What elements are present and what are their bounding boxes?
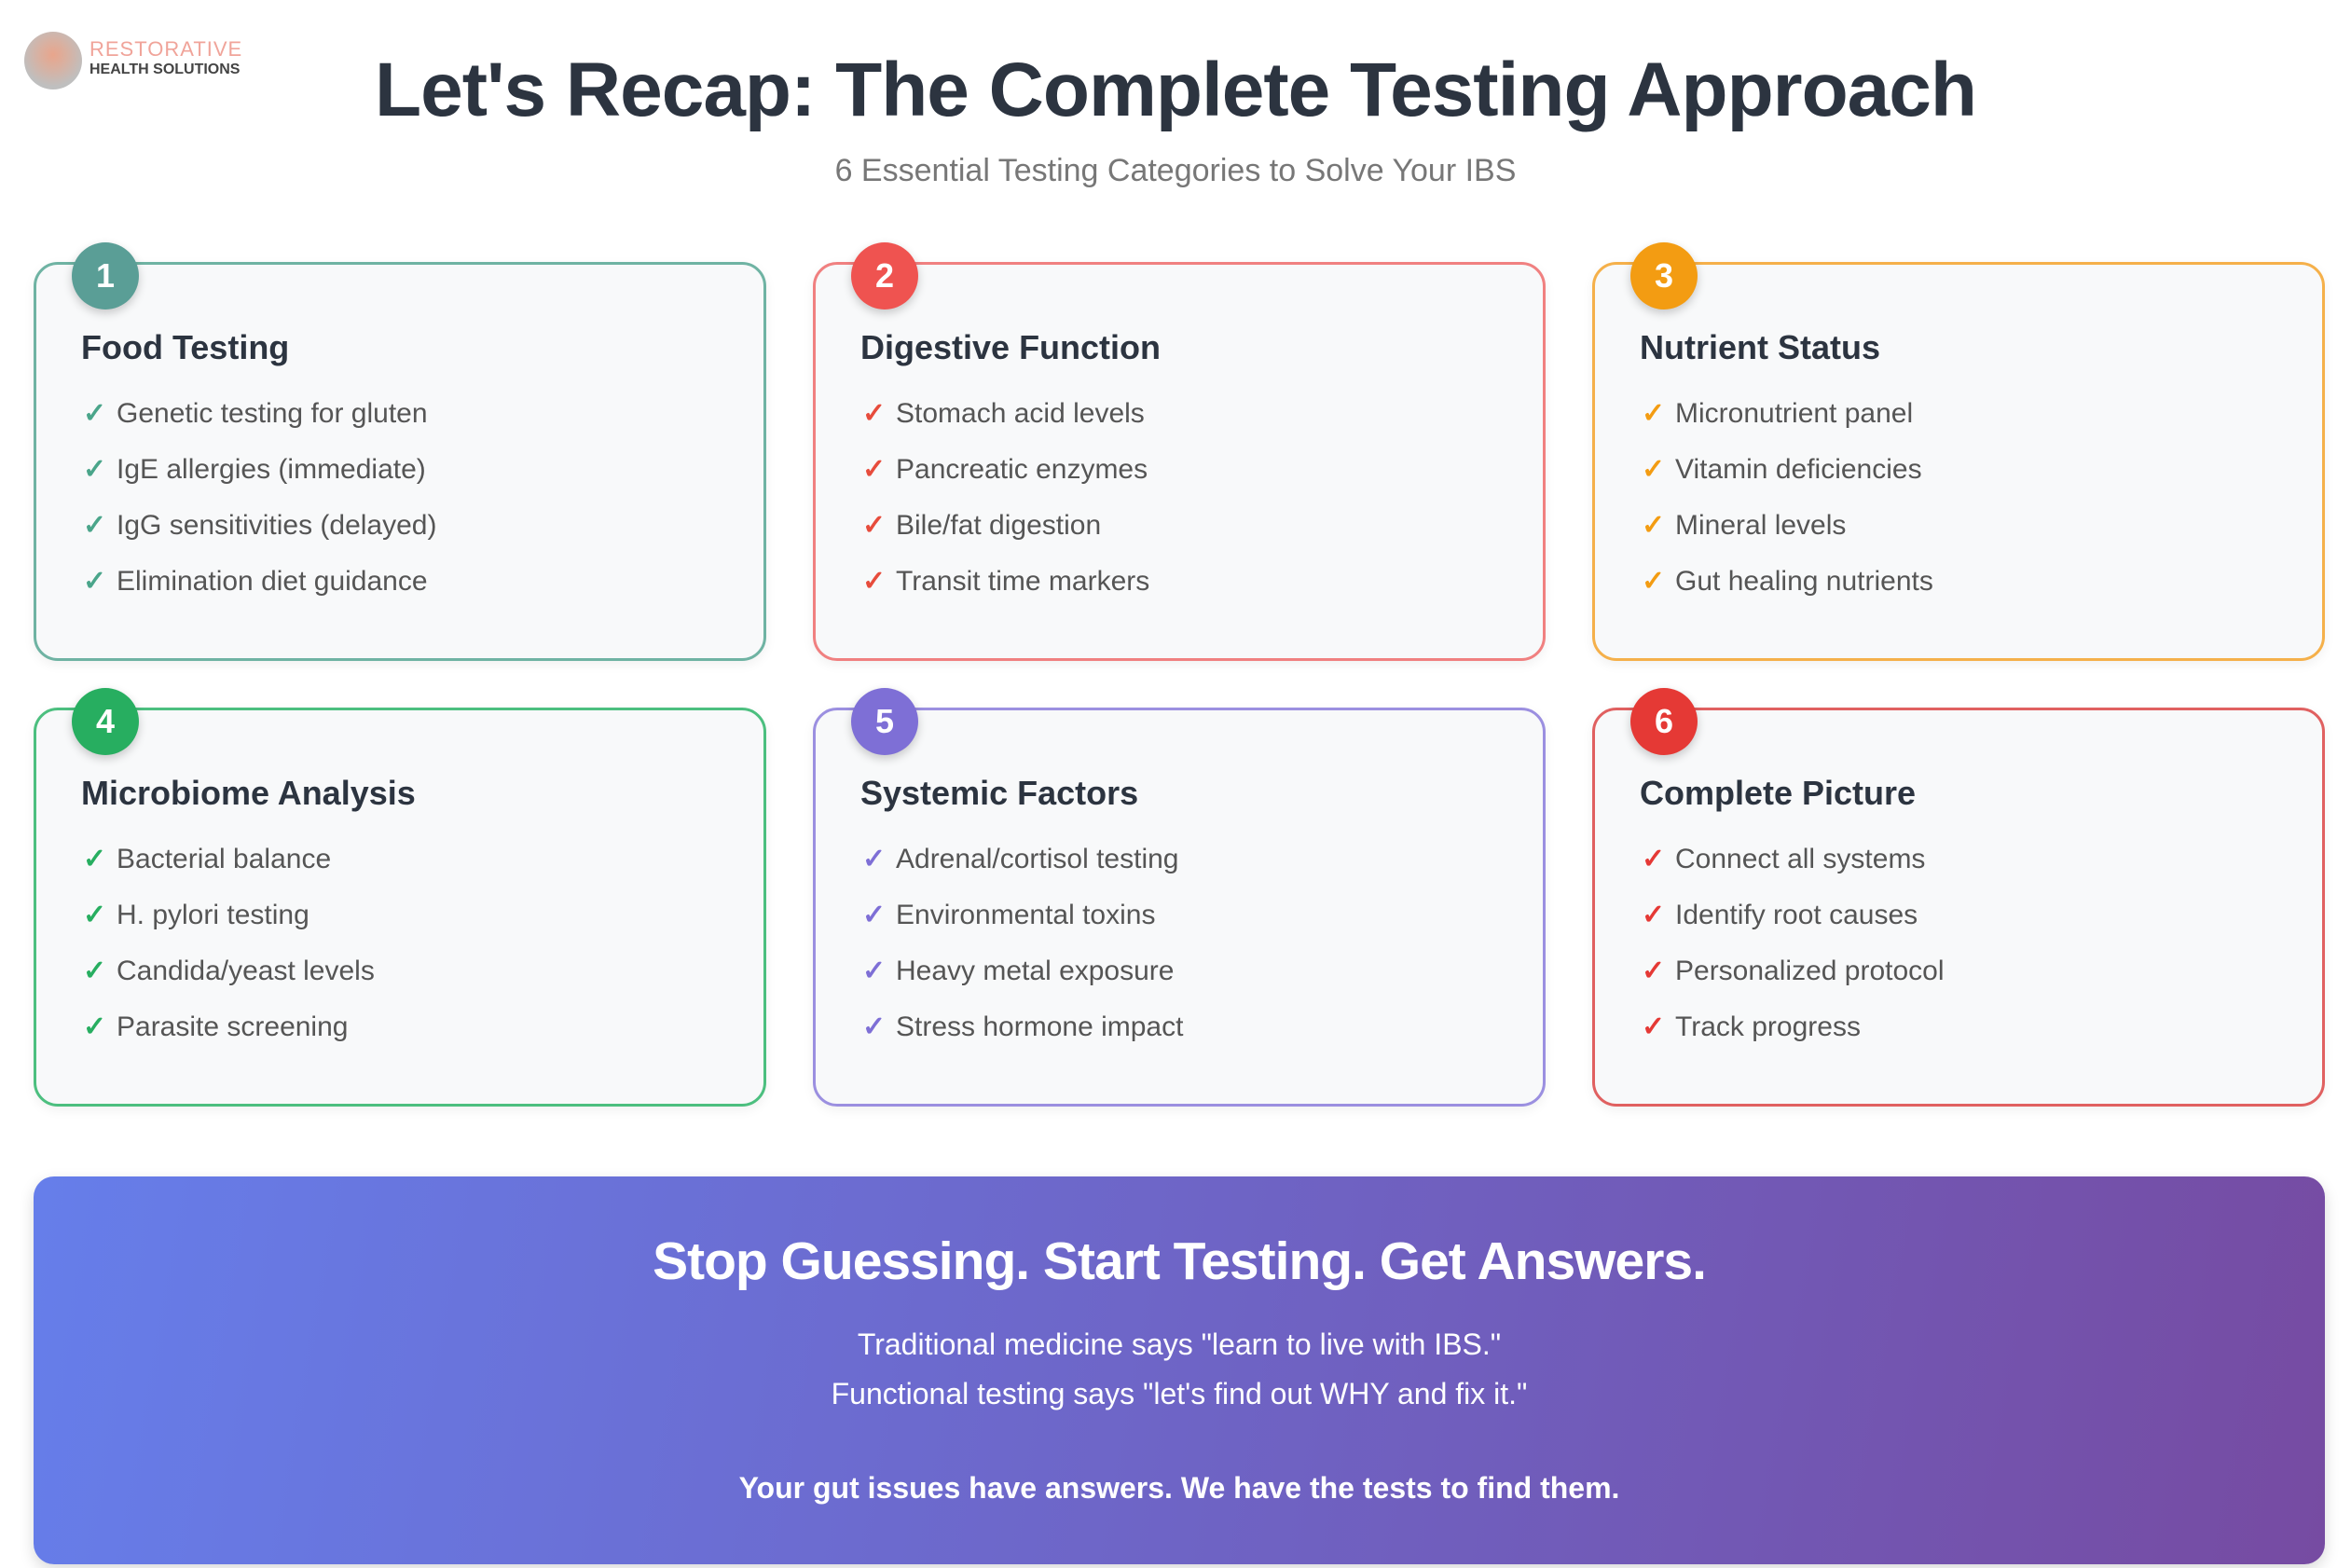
list: ✓ bbox=[1642, 566, 1665, 597]
list: Identify root causes bbox=[1675, 900, 1918, 930]
list: Stomach acid levels bbox=[896, 398, 1145, 429]
badge 3 bbox=[1630, 242, 1698, 309]
subtitle: 6 Essential Testing Categories to Solve Your IBS bbox=[835, 153, 1516, 188]
list: Pancreatic enzymes bbox=[896, 454, 1148, 485]
list bbox=[83, 844, 375, 1042]
badge 1: 1 bbox=[96, 256, 115, 295]
list: ✓ bbox=[83, 566, 106, 597]
banner heading: Stop Guessing. Start Testing. Get Answers. bbox=[653, 1231, 1706, 1291]
list bbox=[1642, 844, 1945, 1042]
list: ✓ bbox=[1642, 510, 1665, 541]
title: Let's Recap: The Complete Testing Approach bbox=[375, 48, 1976, 132]
list: ✓ bbox=[862, 900, 886, 930]
heading: Microbiome Analysis bbox=[81, 774, 416, 812]
panel: systemic factors bbox=[813, 708, 1546, 1107]
list: Adrenal/cortisol testing bbox=[896, 844, 1178, 874]
list: Elimination diet guidance bbox=[117, 566, 428, 597]
list: Parasite screening bbox=[117, 1011, 348, 1042]
list: ✓ bbox=[1642, 900, 1665, 930]
list: Gut healing nutrients bbox=[1675, 566, 1933, 597]
logo text: HEALTH SOLUTIONS bbox=[89, 62, 240, 77]
list: Bacterial balance bbox=[117, 844, 331, 874]
banner text: Traditional medicine says "learn to live with IBS." bbox=[858, 1327, 1501, 1361]
list: Stress hormone impact bbox=[896, 1011, 1183, 1042]
heading: Food Testing bbox=[81, 328, 289, 366]
list: Heavy metal exposure bbox=[896, 956, 1174, 986]
list: ✓ bbox=[83, 956, 106, 986]
list: ✓ bbox=[862, 566, 886, 597]
list: ✓ bbox=[83, 398, 106, 429]
heading: Complete Picture bbox=[1640, 774, 1916, 812]
list: ✓ bbox=[83, 900, 106, 930]
list: ✓ bbox=[83, 510, 106, 541]
badge 5 bbox=[851, 688, 918, 755]
badge 1 bbox=[72, 242, 139, 309]
badge 3: 3 bbox=[1655, 256, 1673, 295]
list: Genetic testing for gluten bbox=[117, 398, 428, 429]
list: ✓ bbox=[1642, 454, 1665, 485]
banner: call to action bbox=[34, 1176, 2325, 1564]
list: ✓ bbox=[1642, 1011, 1665, 1042]
heading: Digestive Function bbox=[860, 328, 1161, 366]
list bbox=[862, 398, 1149, 597]
heading: Nutrient Status bbox=[1640, 328, 1880, 366]
banner text bbox=[832, 1327, 1527, 1410]
logo text: RESTORATIVE bbox=[89, 37, 242, 61]
icon: logo tree bbox=[24, 32, 82, 89]
list: ✓ bbox=[1642, 956, 1665, 986]
badge 2 bbox=[851, 242, 918, 309]
list bbox=[862, 844, 1184, 1042]
list: ✓ bbox=[862, 454, 886, 485]
badge 4: 4 bbox=[96, 702, 115, 740]
badge 4 bbox=[72, 688, 139, 755]
list: Micronutrient panel bbox=[1675, 398, 1913, 429]
list: ✓ bbox=[83, 454, 106, 485]
logo text bbox=[89, 37, 242, 77]
list: ✓ bbox=[83, 1011, 106, 1042]
logo bbox=[24, 32, 242, 89]
list: ✓ bbox=[862, 510, 886, 541]
list bbox=[83, 398, 436, 597]
list: Bile/fat digestion bbox=[896, 510, 1101, 541]
panel: nutrient status bbox=[1592, 262, 2325, 661]
panel: digestive function bbox=[813, 262, 1546, 661]
list: Mineral levels bbox=[1675, 510, 1846, 541]
list: ✓ bbox=[83, 844, 106, 874]
badge 2: 2 bbox=[875, 256, 894, 295]
panel: microbiome analysis bbox=[34, 708, 766, 1107]
panel: food testing bbox=[34, 262, 766, 661]
list: H. pylori testing bbox=[117, 900, 309, 930]
list: Track progress bbox=[1675, 1011, 1861, 1042]
list: ✓ bbox=[1642, 844, 1665, 874]
banner closing line: Your gut issues have answers. We have the tests to find them. bbox=[739, 1471, 1619, 1505]
list: ✓ bbox=[862, 398, 886, 429]
list bbox=[1642, 398, 1933, 597]
list: IgG sensitivities (delayed) bbox=[117, 510, 436, 541]
badge 6: 6 bbox=[1655, 702, 1673, 740]
badge 6 bbox=[1630, 688, 1698, 755]
banner text: Functional testing says "let's find out WHY and fix it." bbox=[832, 1377, 1527, 1410]
list: ✓ bbox=[1642, 398, 1665, 429]
list: Candida/yeast levels bbox=[117, 956, 375, 986]
list: Environmental toxins bbox=[896, 900, 1155, 930]
list: ✓ bbox=[862, 1011, 886, 1042]
list: IgE allergies (immediate) bbox=[117, 454, 426, 485]
list: Connect all systems bbox=[1675, 844, 1925, 874]
badge 5: 5 bbox=[875, 702, 894, 740]
list: Transit time markers bbox=[896, 566, 1149, 597]
list: ✓ bbox=[862, 844, 886, 874]
list: Vitamin deficiencies bbox=[1675, 454, 1922, 485]
heading: Systemic Factors bbox=[860, 774, 1138, 812]
list: Personalized protocol bbox=[1675, 956, 1945, 986]
panel: complete picture bbox=[1592, 708, 2325, 1107]
list: ✓ bbox=[862, 956, 886, 986]
